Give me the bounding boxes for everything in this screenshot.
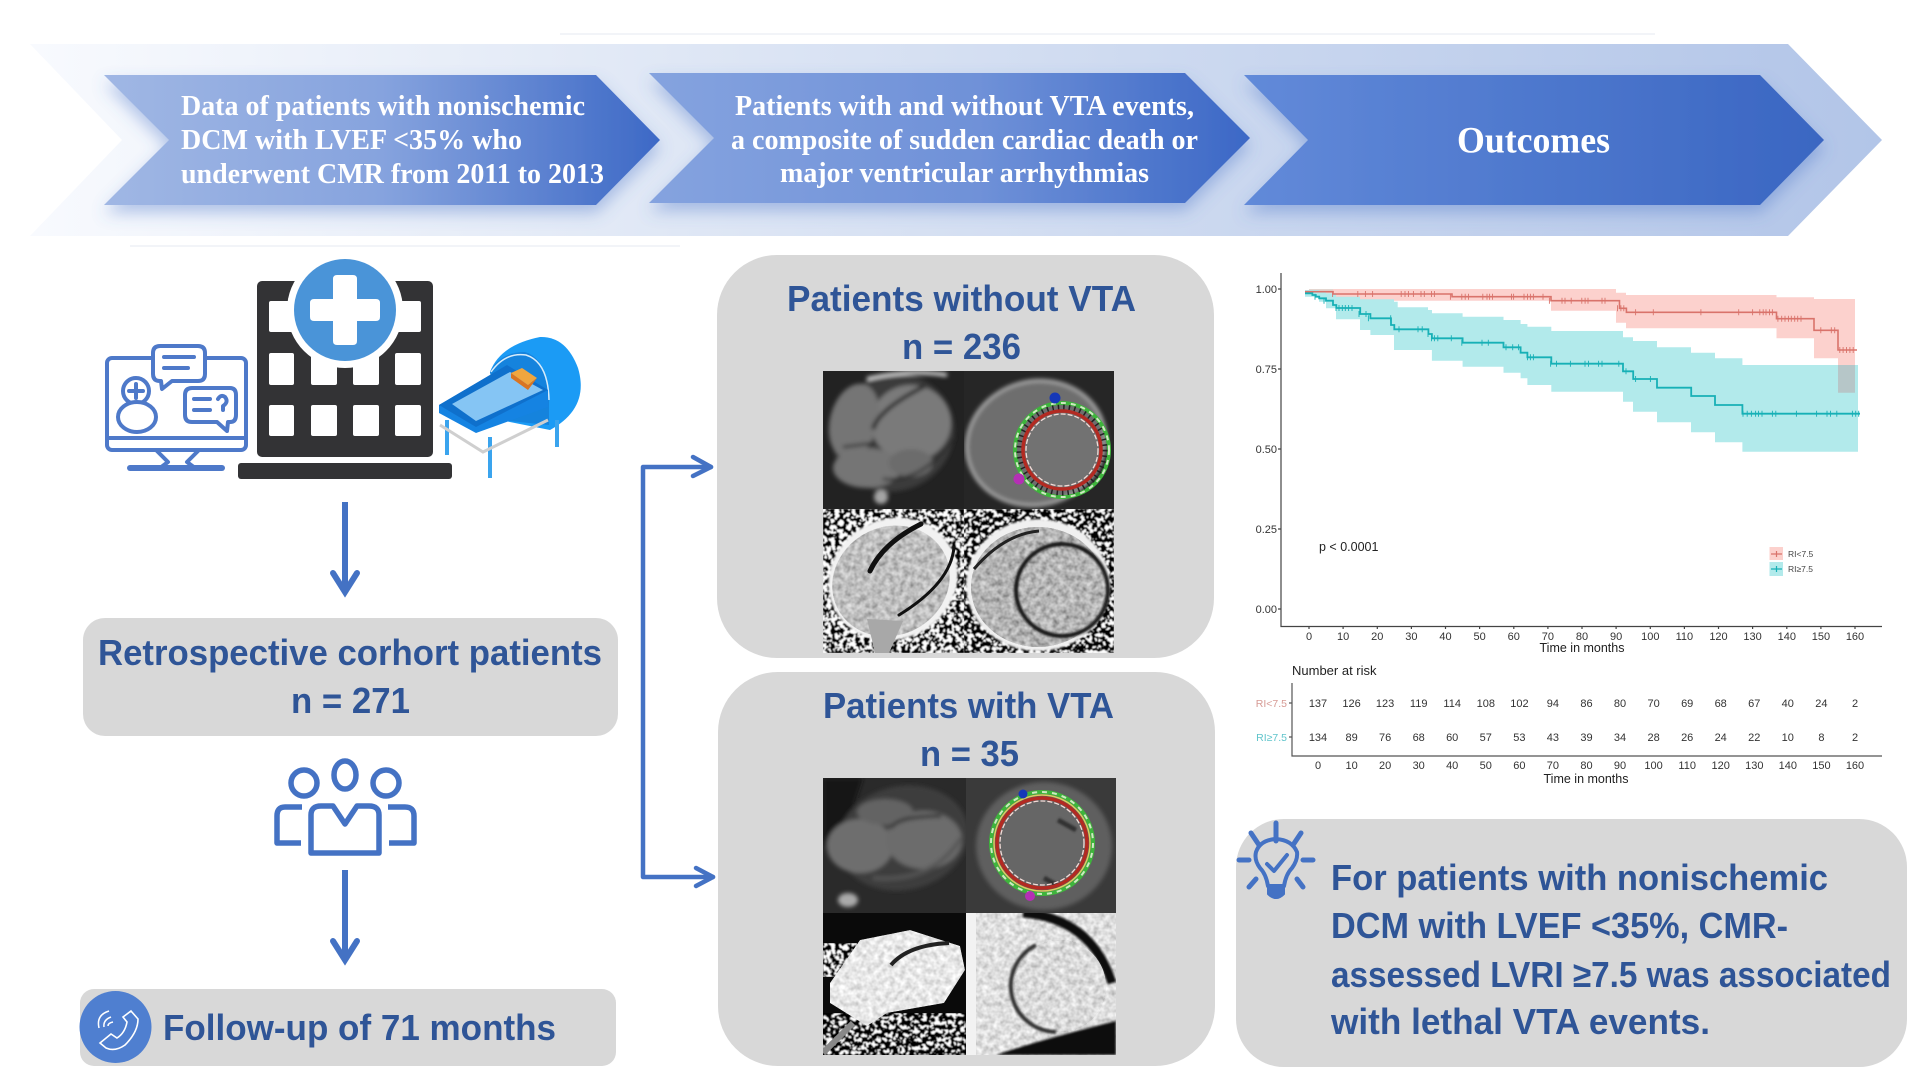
panel: patients without VTA bbox=[717, 255, 1214, 663]
chevron: patients with and without VTA bbox=[649, 73, 1250, 203]
y-axis labels: 0.25 bbox=[1256, 524, 1277, 536]
x-axis labels: 110 bbox=[1676, 631, 1693, 643]
header banner bbox=[30, 44, 1882, 236]
row: RI<7.5: 68 bbox=[1715, 698, 1727, 710]
panel: follow-up: Follow-up of 71 months bbox=[163, 1007, 556, 1048]
table: number at risk: Number at risk bbox=[1292, 663, 1377, 678]
curve: RI<7.5 bbox=[1305, 292, 1857, 350]
censor ticks: RI<7.5 bbox=[1333, 291, 1853, 353]
heading: without VTA bbox=[787, 278, 1136, 367]
x-axis labels: 120 bbox=[1709, 631, 1728, 643]
icon: MRI scanner bbox=[439, 337, 581, 478]
risk table x-axis: 20 bbox=[1379, 760, 1391, 772]
row: RI<7.5: 2 bbox=[1852, 698, 1858, 710]
x-axis labels: 90 bbox=[1610, 631, 1622, 643]
heading: without VTA: n = 236 bbox=[902, 326, 1021, 367]
icon: patient group bbox=[277, 761, 414, 853]
censor ticks: RI≥7.5 bbox=[1315, 294, 1859, 417]
row: RI≥7.5: 24 bbox=[1715, 732, 1727, 744]
row: RI<7.5: 86 bbox=[1580, 698, 1593, 710]
arrow: hospital to cohort bbox=[333, 502, 357, 592]
confidence band: RI<7.5 bbox=[1309, 289, 1855, 393]
row: RI<7.5: 40 bbox=[1782, 698, 1794, 710]
conclusion text: with lethal VTA events. bbox=[1330, 1001, 1710, 1042]
legend: RI<7.5 bbox=[1788, 549, 1814, 559]
row: RI≥7.5: 89 bbox=[1345, 732, 1358, 744]
panel: patients with VTA bbox=[718, 672, 1215, 1066]
row: RI≥7.5: 10 bbox=[1782, 732, 1794, 744]
y-axis labels: 1.00 bbox=[1256, 284, 1277, 296]
chevron: data of patients: DCM with LVEF <35% who bbox=[181, 125, 522, 156]
panel: retrospective cohort bbox=[83, 618, 618, 736]
x-axis labels: 0 bbox=[1306, 631, 1312, 643]
y-axis labels: 0.50 bbox=[1256, 444, 1277, 456]
row: RI≥7.5: 43 bbox=[1547, 732, 1559, 744]
legend bbox=[1770, 547, 1814, 576]
risk table x-axis bbox=[1315, 760, 1864, 786]
icon: hospital building bbox=[238, 252, 452, 479]
heading: without VTA: Patients without VTA bbox=[787, 278, 1136, 319]
x-axis labels: 80 bbox=[1576, 631, 1588, 643]
conclusion text: assessed LVRI ≥7.5 was associated bbox=[1331, 954, 1891, 995]
row: RI≥7.5: 68 bbox=[1413, 732, 1425, 744]
MRI images: without VTA bbox=[807, 354, 1120, 663]
legend: RI≥7.5 bbox=[1788, 564, 1813, 574]
row: RI<7.5: 108 bbox=[1477, 698, 1495, 710]
row: RI<7.5: 67 bbox=[1748, 698, 1760, 710]
risk table x-axis: 60 bbox=[1513, 760, 1526, 772]
chevron: outcomes: Outcomes bbox=[1457, 120, 1610, 162]
icon: light bulb bbox=[1239, 823, 1313, 898]
risk table x-axis: 140 bbox=[1779, 760, 1797, 772]
row: RI≥7.5: 22 bbox=[1748, 732, 1760, 744]
conclusion text bbox=[1330, 857, 1891, 1042]
risk table x-axis: 120 bbox=[1712, 760, 1730, 772]
risk table x-axis: 100 bbox=[1644, 760, 1663, 772]
table: number at risk: RI<7.5 bbox=[1256, 698, 1287, 710]
chevron: data of patients: Data of patients with nonischemic bbox=[181, 91, 585, 122]
y-axis labels: 0.75 bbox=[1256, 364, 1277, 376]
x-axis labels: 60 bbox=[1508, 631, 1520, 643]
row: RI<7.5: 94 bbox=[1547, 698, 1559, 710]
p value: p < 0.0001 bbox=[1319, 540, 1378, 554]
row: RI<7.5 bbox=[1309, 698, 1858, 710]
heading: with VTA: n = 35 bbox=[920, 733, 1019, 774]
arrow: bracket to VTA groups bbox=[643, 457, 713, 886]
x-axis labels: 20 bbox=[1371, 631, 1383, 643]
row: RI≥7.5: 76 bbox=[1379, 732, 1391, 744]
x-axis labels: 10 bbox=[1337, 631, 1349, 643]
row: RI<7.5: 114 bbox=[1443, 698, 1461, 710]
risk table x-axis: 10 bbox=[1345, 760, 1358, 772]
panel: retrospective cohort: n = 271 bbox=[291, 680, 410, 721]
row: RI<7.5: 80 bbox=[1614, 698, 1626, 710]
chevron: data of patients bbox=[104, 75, 660, 205]
risk table x-axis: 50 bbox=[1480, 760, 1492, 772]
risk table x-axis: Time in months bbox=[1544, 772, 1628, 786]
row: RI<7.5: 69 bbox=[1681, 698, 1693, 710]
y-axis labels bbox=[1256, 284, 1277, 616]
risk table x-axis: 160 bbox=[1846, 760, 1864, 772]
panel: follow-up bbox=[80, 989, 616, 1066]
risk table x-axis: 130 bbox=[1745, 760, 1763, 772]
risk table x-axis: 90 bbox=[1614, 760, 1626, 772]
chevron: data of patients: underwent CMR from 2011 to 2013 bbox=[181, 159, 604, 190]
heading: with VTA: Patients with VTA bbox=[823, 685, 1114, 726]
x-axis labels: 130 bbox=[1743, 631, 1762, 643]
row: RI<7.5: 70 bbox=[1647, 698, 1660, 710]
conclusion text: For patients with nonischemic bbox=[1331, 857, 1828, 898]
MRI images: with VTA bbox=[823, 773, 1116, 1055]
icon: phone bbox=[80, 991, 152, 1063]
x-axis labels: 140 bbox=[1778, 631, 1796, 643]
panel: conclusion bbox=[1236, 819, 1907, 1067]
row: RI<7.5: 24 bbox=[1815, 698, 1828, 710]
chevron: outcomes bbox=[1244, 75, 1824, 205]
table: number at risk: RI≥7.5 bbox=[1256, 732, 1287, 744]
row: RI≥7.5: 134 bbox=[1309, 732, 1327, 744]
band overlap bbox=[1838, 365, 1855, 393]
x-axis labels: 100 bbox=[1641, 631, 1659, 643]
risk table x-axis: 40 bbox=[1446, 760, 1458, 772]
background arrow bbox=[30, 44, 1882, 236]
row: RI≥7.5 bbox=[1309, 732, 1858, 744]
decorative header lines bbox=[130, 34, 1655, 246]
axes bbox=[1278, 273, 1882, 629]
x-axis labels: Time in months bbox=[1540, 641, 1624, 655]
row: RI≥7.5: 60 bbox=[1446, 732, 1458, 744]
x-axis labels: 160 bbox=[1846, 631, 1864, 643]
chevron: patients with and without VTA: major ventricular arrhythmias bbox=[780, 158, 1149, 189]
risk table x-axis: 110 bbox=[1678, 760, 1696, 772]
row: RI<7.5: 137 bbox=[1309, 698, 1327, 710]
x-axis labels bbox=[1306, 631, 1864, 655]
arrow: cohort to follow-up bbox=[333, 870, 357, 960]
row: RI≥7.5: 26 bbox=[1681, 732, 1693, 744]
x-axis labels: 30 bbox=[1405, 631, 1418, 643]
row: RI≥7.5: 53 bbox=[1513, 732, 1526, 744]
risk table x-axis: 70 bbox=[1547, 760, 1559, 772]
row: RI≥7.5: 28 bbox=[1647, 732, 1660, 744]
row: RI<7.5: 102 bbox=[1510, 698, 1529, 710]
conclusion text: DCM with LVEF <35%, CMR- bbox=[1331, 905, 1788, 946]
confidence band: RI≥7.5 bbox=[1305, 290, 1858, 452]
chevron: patients with and without VTA: Patients with and without VTA events, bbox=[735, 91, 1194, 122]
row: RI<7.5: 126 bbox=[1342, 698, 1361, 710]
y-axis labels: 0.00 bbox=[1256, 604, 1277, 616]
row: RI≥7.5: 39 bbox=[1580, 732, 1593, 744]
icon: telemedicine monitor bbox=[107, 346, 246, 468]
risk table x-axis: 0 bbox=[1315, 760, 1321, 772]
x-axis labels: 50 bbox=[1473, 631, 1486, 643]
row: RI<7.5: 119 bbox=[1410, 698, 1427, 710]
chart: Kaplan-Meier survival curve bbox=[1256, 273, 1882, 655]
row: RI≥7.5: 8 bbox=[1818, 732, 1824, 744]
panel: retrospective cohort: Retrospective corhort patients bbox=[98, 632, 602, 673]
row: RI≥7.5: 34 bbox=[1614, 732, 1626, 744]
x-axis labels: 70 bbox=[1542, 631, 1554, 643]
curve: RI≥7.5 bbox=[1305, 293, 1860, 414]
table: number at risk bbox=[1256, 663, 1882, 786]
risk table x-axis: 150 bbox=[1812, 760, 1831, 772]
heading: with VTA bbox=[823, 685, 1114, 774]
x-axis labels: 150 bbox=[1812, 631, 1830, 643]
chevron: patients with and without VTA: a composite of sudden cardiac death or bbox=[731, 125, 1198, 156]
row: RI<7.5: 123 bbox=[1376, 698, 1394, 710]
risk table x-axis: 80 bbox=[1580, 760, 1593, 772]
row: RI≥7.5: 2 bbox=[1852, 732, 1858, 744]
row: RI≥7.5: 57 bbox=[1480, 732, 1492, 744]
risk table x-axis: 30 bbox=[1413, 760, 1425, 772]
x-axis labels: 40 bbox=[1439, 631, 1452, 643]
